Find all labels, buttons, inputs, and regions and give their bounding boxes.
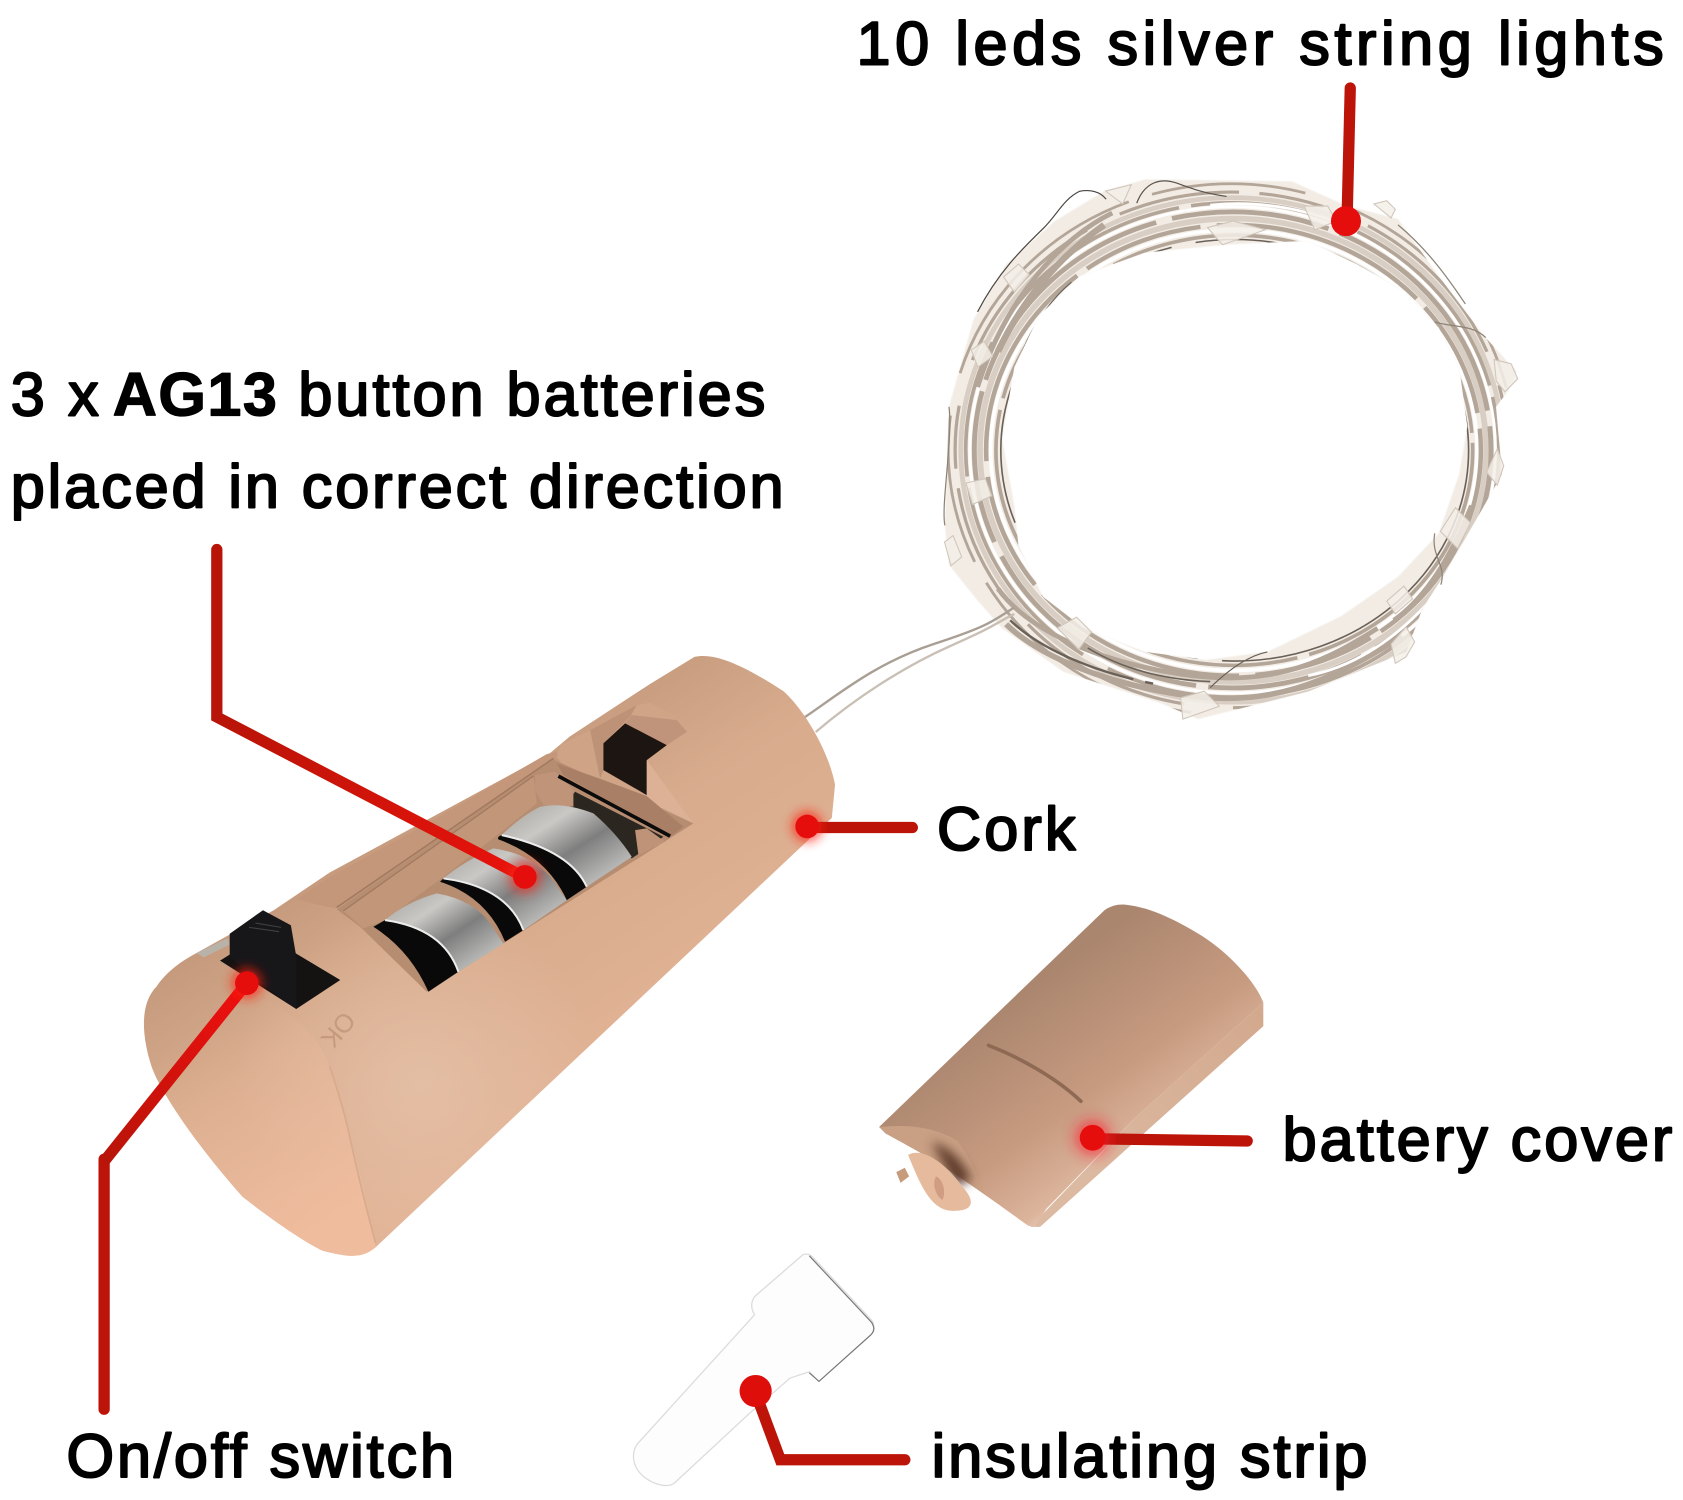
coil band and wires bbox=[944, 179, 1516, 719]
label: on/off switch: On/off switch bbox=[67, 1422, 454, 1490]
label: batteries: placed in correct direction bbox=[11, 453, 784, 521]
loose outer wires bbox=[944, 181, 1486, 688]
cork end cap shading bbox=[144, 982, 376, 1256]
label: insulating strip: insulating strip bbox=[932, 1422, 1367, 1490]
pull tab bbox=[908, 1153, 971, 1211]
label: string lights: 10 leds silver string lights bbox=[857, 9, 1664, 77]
interior back bbox=[557, 763, 683, 837]
switch slot bbox=[220, 934, 340, 1009]
icon: clear insulating strip bbox=[633, 1254, 874, 1486]
label: batteries: AG13 bbox=[113, 360, 277, 428]
label: battery cover: battery cover bbox=[1283, 1105, 1672, 1173]
on/off switch knob bbox=[230, 910, 296, 1009]
icon: silver LED string light coil bbox=[944, 179, 1518, 719]
button batteries bbox=[373, 805, 632, 992]
callout: on/off switch leader bbox=[104, 968, 262, 1409]
cork body bbox=[144, 656, 835, 1256]
metal tab bbox=[196, 938, 230, 957]
label: batteries: 3 x bbox=[11, 360, 99, 428]
cover side facet bbox=[1030, 1003, 1263, 1227]
wall bbox=[337, 759, 693, 992]
icon: cork body with battery compartment bbox=[144, 656, 835, 1256]
embossed mark: OK bbox=[315, 1006, 360, 1053]
callout: string lights leader bbox=[1331, 88, 1361, 236]
label: batteries bbox=[11, 360, 784, 521]
label: cork: Cork bbox=[937, 795, 1076, 863]
cover slot bbox=[989, 1045, 1081, 1101]
callout: batteries leader bbox=[217, 550, 541, 893]
cover top surface bbox=[879, 904, 1263, 1227]
icon: wire from cork to coil bbox=[805, 608, 1014, 732]
cover front arc bbox=[879, 1126, 984, 1194]
battery compartment bbox=[296, 703, 693, 992]
notch hole bbox=[603, 723, 667, 795]
label: batteries: button batteries bbox=[298, 360, 765, 428]
callout: cork leader bbox=[792, 811, 912, 842]
callout: insulating strip leader bbox=[740, 1375, 905, 1460]
LED beads bbox=[945, 185, 1518, 719]
notch rim block bbox=[557, 730, 600, 778]
icon: battery cover bbox=[879, 904, 1263, 1227]
callout: battery cover leader bbox=[1075, 1121, 1247, 1155]
notch surround bbox=[560, 703, 693, 823]
top strip bbox=[296, 752, 560, 908]
